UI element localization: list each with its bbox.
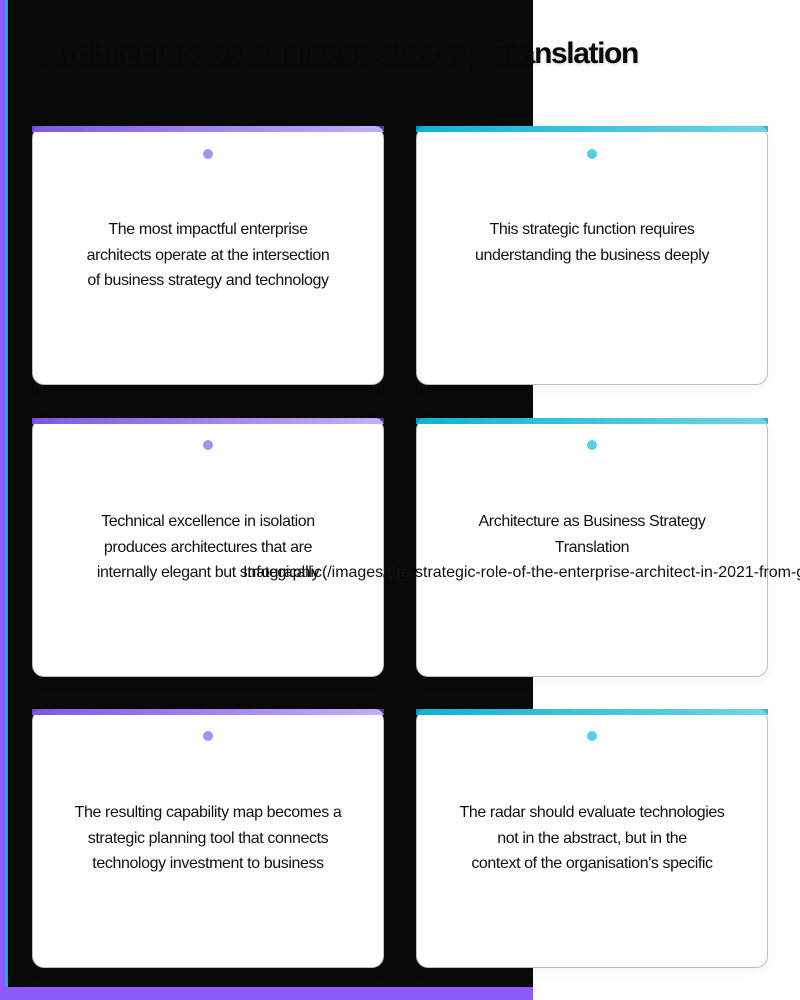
card text: Architecture as Business Strategy [479, 513, 705, 530]
card dot [203, 440, 213, 450]
card dot [587, 440, 597, 450]
card dot [587, 731, 597, 741]
card text [87, 221, 329, 289]
card text: internally elegant but strategically [97, 564, 319, 581]
card text [475, 221, 710, 264]
card text: context of the organisation's specific [471, 855, 713, 872]
cyan left stripe [5, 0, 8, 987]
card text: The most impactful enterprise [108, 221, 308, 238]
purple bottom bar [0, 987, 533, 1000]
card: strategic function [416, 126, 768, 385]
card text: understanding the business deeply [475, 247, 709, 264]
card dot [587, 149, 597, 159]
card text [97, 513, 320, 581]
card accent bar [32, 418, 384, 424]
card accent bar [32, 126, 384, 132]
card accent bar [416, 709, 768, 715]
card: technical excellence [32, 418, 384, 677]
card accent bar [32, 709, 384, 715]
card: radar [416, 709, 768, 968]
card text: of business strategy and technology [87, 272, 329, 289]
card text: The radar should evaluate technologies [460, 804, 724, 821]
card dot [203, 149, 213, 159]
title: Architecture as Business Strategy Translation [44, 37, 638, 70]
card text [243, 513, 800, 581]
card text: This strategic function requires [489, 221, 695, 238]
card: infographic reference [416, 418, 768, 677]
card accent bar [416, 126, 768, 132]
card accent bar [416, 418, 768, 424]
card text: technology investment to business [92, 855, 324, 872]
card text: Technical excellence in isolation [101, 513, 315, 530]
card text: Translation [555, 539, 629, 556]
card text: The resulting capability map becomes a [75, 804, 341, 821]
card text: produces architectures that are [104, 539, 312, 556]
card text: architects operate at the intersection [87, 247, 329, 264]
purple left stripe [0, 0, 5, 987]
card: capability map [32, 709, 384, 968]
card: enterprise architects intersection [32, 126, 384, 385]
card text: not in the abstract, but in the [497, 830, 687, 847]
card text: strategic planning tool that connects [88, 830, 328, 847]
dark background panel [0, 0, 533, 1000]
card text [75, 804, 342, 872]
card text [460, 804, 724, 872]
card dot [203, 731, 213, 741]
